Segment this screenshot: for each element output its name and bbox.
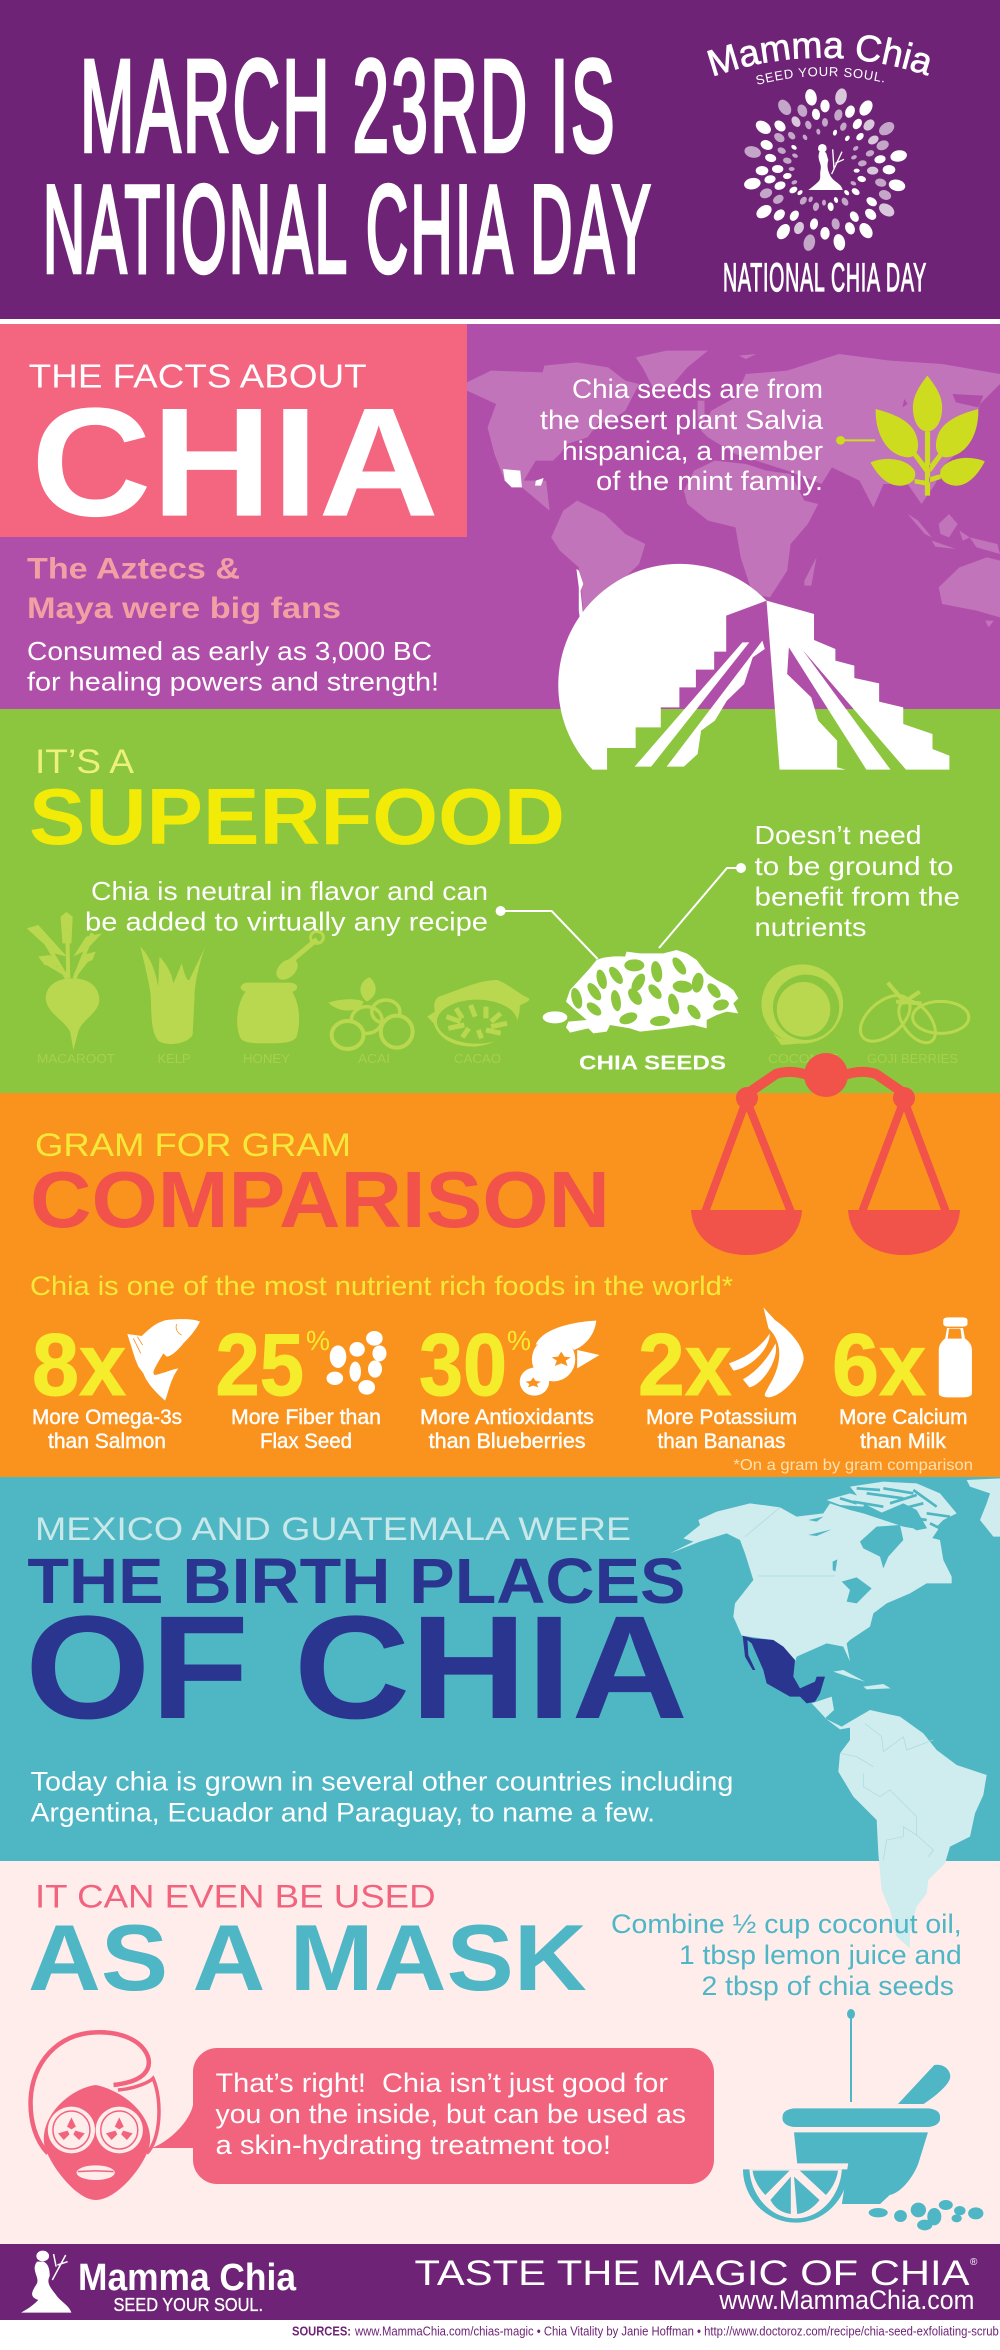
text: aztecs and maya: The Aztecs & <box>27 553 240 586</box>
labels: superfood names: ACAI <box>358 1051 390 1066</box>
map: world <box>467 351 1000 627</box>
stat: antioxidants: % <box>507 1325 531 1356</box>
text: salvia hispanica: the desert plant Salvia <box>540 405 824 435</box>
text: mask recipe <box>611 1909 962 2001</box>
stat: omega-3s <box>32 1315 200 1453</box>
text: salvia hispanica: hispanica, a member <box>562 436 823 466</box>
icon: bananas <box>729 1307 804 1397</box>
tagline: www.MammaChia.com <box>718 2285 974 2315</box>
logo: wordmark: Mamma Chia <box>78 2257 297 2299</box>
text: aztecs and maya: Maya were big fans <box>27 592 341 625</box>
text: mask recipe: 1 tbsp lemon juice and <box>679 1940 962 1970</box>
label: chia seeds: CHIA SEEDS <box>579 1052 726 1074</box>
footnote: *On a gram by gram comparison <box>733 1457 973 1474</box>
icon: acai <box>328 977 413 1049</box>
icon: coconut <box>761 964 843 1045</box>
stat: fiber: Flax Seed <box>260 1430 352 1453</box>
stat: antioxidants <box>419 1315 599 1453</box>
stat: potassium <box>638 1307 804 1453</box>
tagline <box>414 2254 978 2315</box>
text: aztecs and maya <box>27 553 439 697</box>
panel: superfood <box>0 709 1000 1093</box>
icons: other superfoods <box>27 912 969 1050</box>
text: neutral in flavor <box>85 876 488 937</box>
tagline: TASTE THE MAGIC OF CHIA <box>414 2254 970 2293</box>
stat: potassium: More Potassium <box>646 1406 797 1429</box>
icon: kneeling woman <box>21 2251 71 2313</box>
text: salvia hispanica: of the mint family. <box>596 466 823 496</box>
icon: blueberries <box>520 1321 599 1396</box>
text: other countries: Argentina, Ecuador and Paraguay, to name a few. <box>31 1798 655 1828</box>
stat: fiber: More Fiber than <box>231 1406 381 1429</box>
icon: goji berries <box>850 983 969 1045</box>
stat: potassium: than Bananas <box>658 1430 786 1453</box>
stat: antioxidants: More Antioxidants <box>420 1406 594 1429</box>
block: pink title box: CHIA <box>31 376 439 549</box>
heading: THE BIRTH PLACES <box>27 1545 685 1617</box>
stat: calcium: 6x <box>832 1315 926 1414</box>
highlight: mexico and chile on map <box>503 469 583 624</box>
labels: superfood names: CACAO <box>454 1051 501 1066</box>
stat: omega-3s: More Omega-3s <box>32 1406 182 1429</box>
text: salvia hispanica: Chia seeds are from <box>572 374 823 404</box>
stat: calcium: than Milk <box>860 1430 947 1453</box>
icon: chia plant with connector <box>836 376 985 496</box>
heading: COMPARISON <box>30 1155 610 1244</box>
heading <box>25 1511 688 1750</box>
stat: omega-3s: 8x <box>32 1315 126 1414</box>
panel: birth places of chia <box>0 1477 1000 1948</box>
text: aztecs and maya: Consumed as early as 3,000 BC <box>27 636 432 666</box>
labels: superfood names: GOJI BERRIES <box>867 1051 958 1066</box>
panel: facts about chia <box>0 324 1000 770</box>
block: pink title box <box>0 324 467 549</box>
icon: seed burst with kneeling woman <box>743 87 908 252</box>
labels: superfood names <box>37 1051 958 1066</box>
text: doesn't need grinding: to be ground to <box>754 851 954 881</box>
icon: cacao <box>427 980 529 1047</box>
labels: superfood names: COCONUT <box>768 1051 838 1066</box>
text: mask recipe: Combine ½ cup coconut oil, <box>611 1909 962 1939</box>
text: salvia hispanica <box>540 374 824 496</box>
labels: superfood names: HONEY <box>243 1051 290 1066</box>
stat: antioxidants: 30 <box>419 1315 507 1414</box>
logo: Mamma Chia wordmark: SEED YOUR SOUL. <box>756 67 884 84</box>
stat: antioxidants: than Blueberries <box>429 1430 586 1453</box>
stat: fiber <box>216 1315 386 1453</box>
logo: wordmark: SEED YOUR SOUL. <box>114 2295 263 2315</box>
stat: calcium: More Calcium <box>839 1406 968 1429</box>
icon: chia seeds pile <box>543 950 738 1033</box>
icon: honey <box>237 931 323 1043</box>
text: neutral in flavor: Chia is neutral in flavor and can <box>91 876 488 906</box>
heading: SUPERFOOD <box>29 772 565 861</box>
text: doesn't need grinding: nutrients <box>754 912 866 942</box>
icon: kelp <box>140 947 205 1044</box>
stat: calcium <box>832 1315 972 1453</box>
block: pink title box: THE FACTS ABOUT <box>29 358 367 394</box>
icon: milk bottle <box>939 1317 972 1397</box>
title <box>43 32 653 299</box>
labels: superfood names: KELP <box>158 1051 190 1066</box>
stat: potassium: 2x <box>638 1315 732 1414</box>
stat: omega-3s: than Salmon <box>48 1430 166 1453</box>
heading: GRAM FOR GRAM <box>35 1127 351 1163</box>
arrow: flavor callout <box>497 907 598 959</box>
tagline: ® <box>970 2257 978 2268</box>
labels: superfood names: MACAROOT <box>37 1051 115 1066</box>
panel: header <box>0 0 1000 319</box>
heading: IT CAN EVEN BE USED <box>35 1879 436 1915</box>
text: neutral in flavor: be added to virtually any recipe <box>85 907 488 937</box>
stat: fiber: 25 <box>216 1315 304 1414</box>
sources: SOURCES: <box>292 2324 351 2339</box>
text: mask recipe: 2 tbsp of chia seeds <box>702 1971 954 2001</box>
map: the americas <box>670 1478 1000 1948</box>
heading: IT’S A <box>35 743 134 781</box>
text: other countries: Today chia is grown in several other countries including <box>31 1767 733 1797</box>
icon: sun and pyramid <box>558 564 949 770</box>
stat: fiber: % <box>306 1325 330 1356</box>
icon: balance scale <box>691 1053 960 1255</box>
panel: footer <box>0 2244 1000 2320</box>
text: doesn't need grinding <box>754 820 960 942</box>
arrow: recipe connector <box>847 2009 855 2102</box>
icon: mortar, pestle, lemon and seeds <box>743 2065 983 2230</box>
text: doesn't need grinding: benefit from the <box>754 882 960 912</box>
icon: macaroot <box>27 912 102 1050</box>
text: doesn't need grinding: Doesn’t need <box>754 820 922 850</box>
logo: wordmark <box>78 2257 297 2315</box>
logo: Mamma Chia wordmark: Mamma Chia <box>707 35 930 76</box>
callout: speech bubble: a skin-hydrating treatment too! <box>216 2130 611 2160</box>
panel: mask <box>0 1861 1000 2244</box>
panel: gram for gram comparison <box>0 1053 1000 1477</box>
heading: MEXICO AND GUATEMALA WERE <box>35 1511 631 1547</box>
heading: OF CHIA <box>25 1586 688 1750</box>
callout: speech bubble <box>152 2048 714 2184</box>
icon: face with mask <box>31 2032 159 2200</box>
heading: AS A MASK <box>28 1905 587 2010</box>
callout: speech bubble: you on the inside, but can be used as <box>216 2099 686 2129</box>
callout: speech bubble: That’s right! Chia isn’t just good for <box>216 2068 668 2098</box>
icon: salmon <box>127 1319 200 1401</box>
text: aztecs and maya: for healing powers and strength! <box>27 667 439 697</box>
text: nutrient rich: Chia is one of the most nutrient rich foods in the world* <box>30 1271 734 1301</box>
arrow: ground callout <box>659 864 745 948</box>
text: other countries <box>31 1767 733 1828</box>
icon: flax seeds <box>327 1331 386 1395</box>
